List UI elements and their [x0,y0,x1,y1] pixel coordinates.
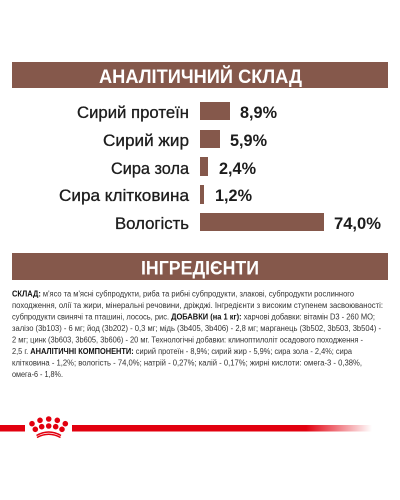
text block: ingredients list: 2,5 г. АНАЛІТИЧНІ КОМПОНЕНТИ: сирий протеїн - 8,9%; сирий жир - 5,9%; сира зола - 2,4%; сира [12,347,352,356]
row: crude fibre: 1,2% [215,187,252,205]
row: crude fat: 5,9% [230,132,267,150]
row: crude fat [103,130,267,150]
icon: royal canin crown logo [29,416,68,438]
row: crude ash: 2,4% [219,160,256,178]
text block: ingredients list [12,290,383,379]
row: moisture [115,213,381,233]
text block: ingredients list: субпродукти свинячі та пташині, лосось, рис. ДОБАВКИ (на 1 кг): харчові добавки: вітамін D3 - 260 МО; [12,312,375,322]
row: crude protein [77,102,277,122]
text block: ingredients list: залізо (3b103) - 6 мг; йод (3b202) - 0,3 мг; мідь (3b405, 3b406) - 2,8 мг; марганець (3b502, 3b503, 3b504) - [12,324,381,333]
row: crude protein: 8,9% [240,104,277,122]
heading: ingredients [12,253,388,280]
row: crude protein: Сирий протеїн [77,104,189,122]
text block: ingredients list: клітковина - 1,2%; вологість - 74,0%; натрій - 0,27%; калій - 0,17%; жирні кислоти: омега-3 - 0,38%, [12,358,362,368]
heading: analytical composition: АНАЛІТИЧНИЙ СКЛАД [99,66,302,88]
row: crude ash: Сира зола [111,160,190,178]
text block: ingredients list: 2 мг; цинк (3b603, 3b605, 3b606) - 20 мг. Технологічні добавки: клиноптилоліт осадового походження - [12,336,363,344]
text block: ingredients list: походження, олії та жири, мінеральні речовини, дріжджі. Інгредієнти з високим ступенем засвоюваності: [12,301,383,310]
text block: ingredients list: омега-6 - 1,8%. [12,370,63,379]
row: crude fibre: Сира клітковина [59,187,190,205]
bar chart: analytical composition [59,102,381,233]
text block: ingredients list: СКЛАД: м'ясо та м'ясні субпродукти, риба та рибні субпродукти, злакові, субпродукти рослинного [12,290,355,298]
row: moisture: Вологість [115,215,189,233]
row: crude ash [111,157,256,178]
footer red line [0,425,372,432]
heading: ingredients: ІНГРЕДІЄНТИ [141,258,259,280]
row: crude fat: Сирий жир [103,132,189,150]
row: moisture: 74,0% [334,215,381,233]
row: crude fibre [59,185,252,205]
heading: analytical composition [12,62,388,88]
